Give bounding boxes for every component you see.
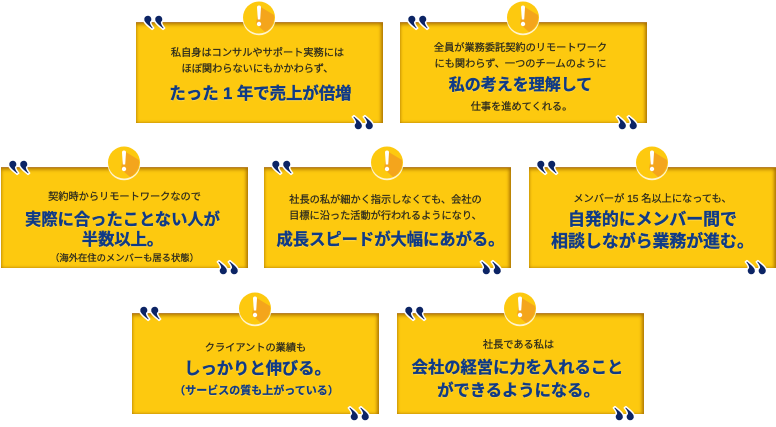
icon: closing quote	[744, 260, 766, 274]
text: intro line 2: にも関わらず、一つのチームのように	[435, 59, 606, 70]
text: headline line 2: ができるようになる。	[437, 382, 600, 400]
icon: opening quote	[140, 306, 162, 322]
text: intro: クライアントの業績も	[205, 343, 306, 354]
text: note: （サービスの質も上がっている）	[174, 385, 339, 397]
icon: closing quote	[616, 114, 638, 130]
text: intro: 契約時からリモートワークなので	[48, 192, 201, 203]
panel: card 4	[264, 146, 511, 274]
text: intro: 社長である私は	[483, 340, 554, 351]
panel: card 1	[136, 2, 383, 130]
icon: closing quote	[612, 406, 634, 420]
icon: exclamation	[636, 146, 668, 180]
panel: card 2	[400, 2, 647, 130]
icon: opening quote	[8, 160, 30, 176]
icon: exclamation	[370, 146, 404, 180]
icon: exclamation	[506, 2, 540, 36]
text: headline: 会社の経営に力を入れること	[412, 359, 623, 377]
icon: opening quote	[272, 160, 294, 176]
text: intro: 私自身はコンサルやサポート実務には	[171, 48, 344, 59]
icon: opening quote	[408, 16, 430, 30]
panel: card 3	[1, 146, 248, 274]
icon: closing quote	[216, 260, 238, 274]
panel: card 7	[397, 292, 644, 420]
text: headline: 私の考えを理解して	[449, 77, 592, 94]
icon: closing quote	[352, 114, 374, 130]
panel: card 5	[529, 146, 776, 274]
icon: exclamation	[242, 2, 276, 36]
text: intro: メンバーが 15 名以上になっても、	[573, 194, 732, 205]
text: headline: 自発的にメンバー間で	[568, 210, 737, 229]
text: headline line 2: 半数以上。	[82, 231, 163, 249]
text: headline: しっかりと伸びる。	[184, 360, 331, 378]
icon: opening quote	[404, 306, 426, 322]
text: closing: 仕事を進めてくれる。	[471, 102, 572, 113]
text: headline: 実際に合ったことない人が	[25, 211, 220, 229]
text: note: （海外在住のメンバーも居る状態）	[50, 253, 199, 263]
text: intro line 2: ほぼ関わらないにもかかわらず、	[182, 64, 333, 75]
text: headline: 成長スピードが大幅にあがる。	[277, 231, 504, 249]
panel: card 6	[132, 292, 379, 420]
text: headline line 2: 相談しながら業務が進む。	[551, 232, 754, 251]
icon: exclamation	[504, 292, 536, 326]
icon: closing quote	[480, 260, 502, 274]
icon: opening quote	[536, 160, 558, 176]
text: intro line 2: 目標に沿った活動が行われるようになり、	[289, 211, 482, 222]
icon: opening quote	[144, 16, 166, 30]
icon: closing quote	[348, 406, 370, 420]
icon: exclamation	[108, 146, 140, 180]
text: intro: 社長の私が細かく指示しなくても、会社の	[289, 195, 482, 206]
text: headline: たった 1 年で売上が倍増	[169, 85, 352, 103]
icon: exclamation	[238, 292, 272, 326]
text: intro: 全員が業務委託契約のリモートワーク	[434, 43, 607, 54]
